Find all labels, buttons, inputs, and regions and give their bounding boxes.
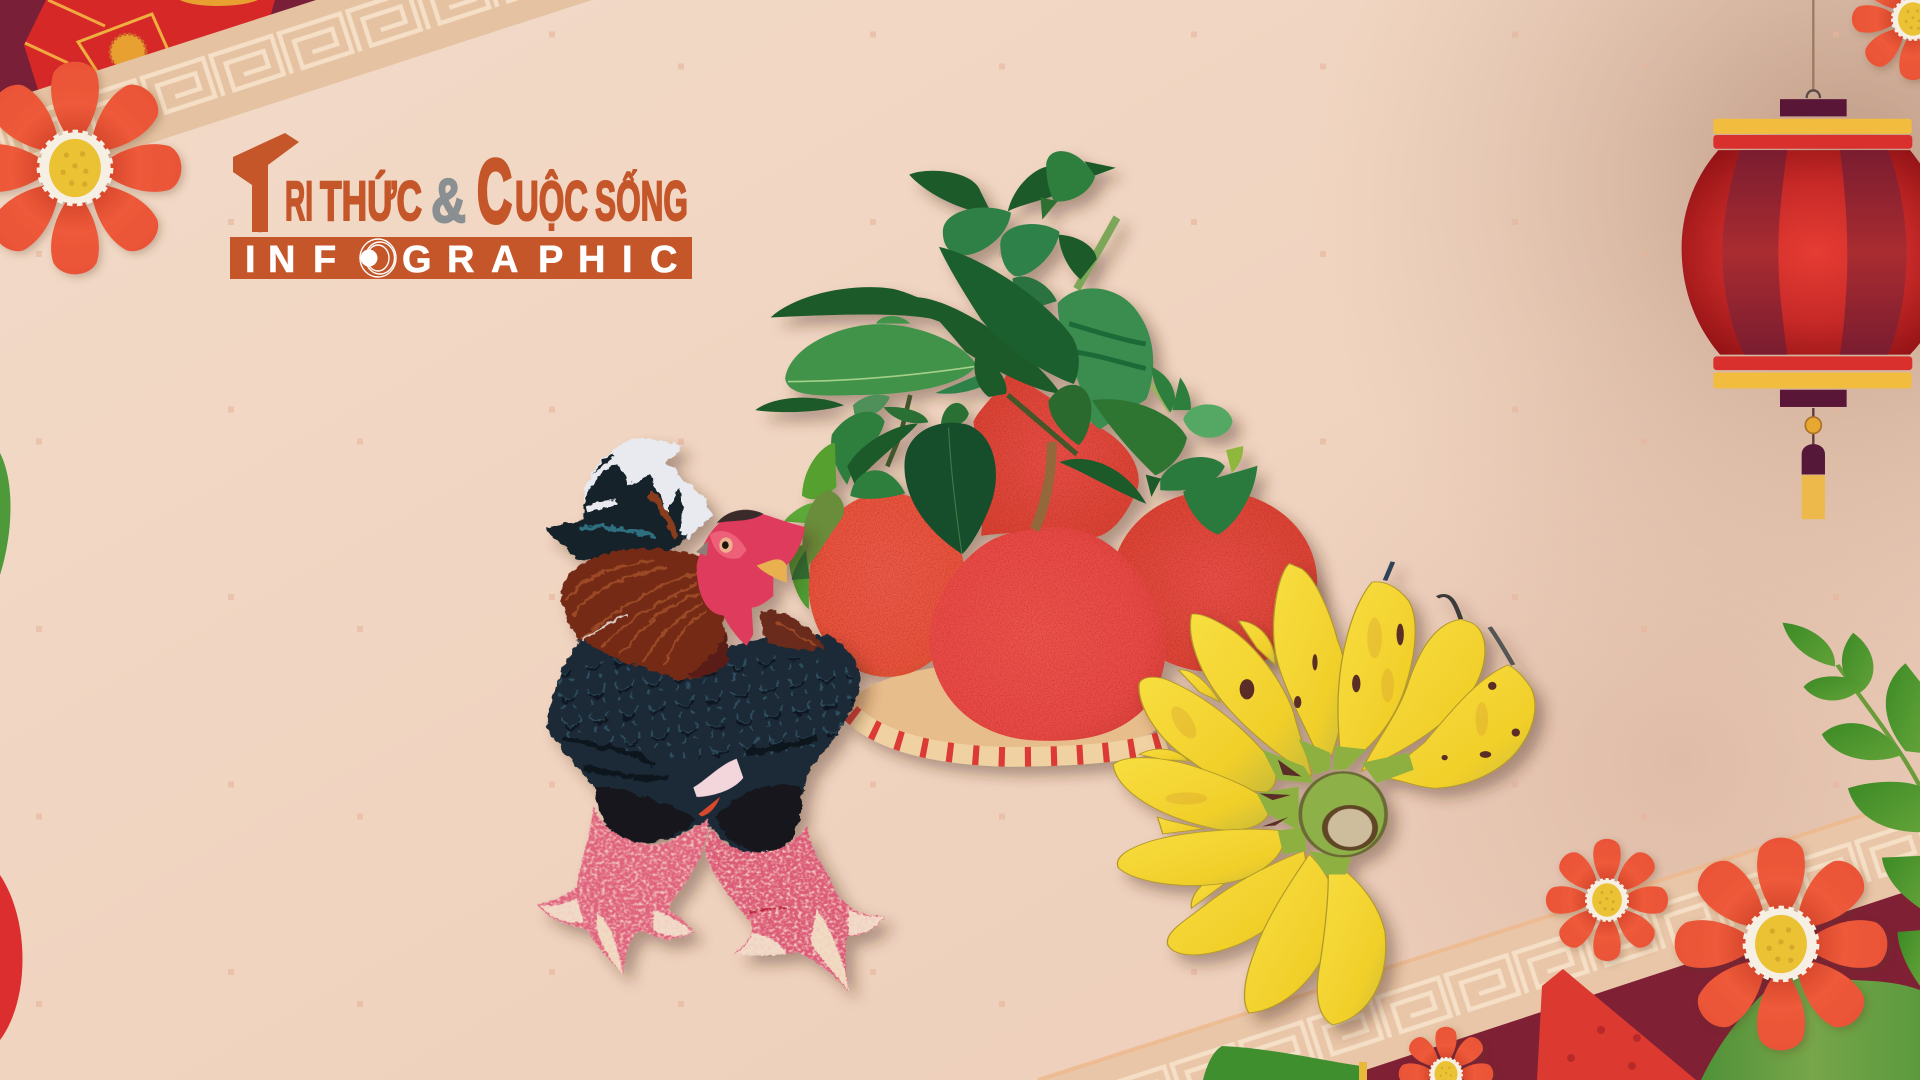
rooster (537, 438, 885, 992)
lantern top yellow bar (1713, 119, 1912, 134)
logo ring icon (360, 239, 396, 277)
lantern body (1682, 150, 1920, 355)
lantern string (1810, 0, 1817, 91)
tail feathers (545, 438, 713, 560)
logo wordmark: RI (285, 169, 313, 232)
lantern top red bar (1713, 135, 1912, 149)
small green leaf (1203, 1046, 1367, 1080)
hackle feathers (560, 548, 825, 680)
lantern top cap (1780, 99, 1847, 116)
patterned ribbon (1038, 797, 1920, 1080)
patterned ribbon (0, 0, 592, 192)
logo wordmark: THỨC (320, 169, 422, 232)
flower: top left (0, 62, 181, 274)
logo wordmark (233, 133, 688, 252)
front pomelo (930, 527, 1166, 741)
banana stems (1385, 562, 1513, 665)
right pomelo (1112, 491, 1317, 672)
logo wordmark: & (431, 167, 466, 236)
flower: top right (1852, 0, 1920, 80)
lantern bottom red bar (1713, 356, 1912, 370)
banana bunch (1113, 562, 1535, 1025)
top-left corner decoration (0, 0, 592, 192)
flower: bottom right small (1546, 839, 1668, 961)
large green leaf (1701, 972, 1920, 1080)
branch and stem (887, 218, 1171, 530)
red envelope (1537, 969, 1696, 1080)
banana crown (1300, 772, 1386, 856)
green vine (1783, 623, 1920, 986)
banana fingers (1113, 564, 1535, 1025)
pomelo fruit tray (755, 151, 1317, 760)
pomelo leaves (755, 151, 1257, 609)
maroon packet (0, 0, 330, 110)
flower: bottom centre (1399, 1027, 1493, 1080)
logo wordmark: T (254, 145, 266, 252)
hanging lantern (1682, 0, 1920, 519)
chest claw (693, 759, 743, 816)
maroon packet (1335, 887, 1920, 1080)
logo wordmark: SỐNG (595, 169, 688, 232)
flower: bottom right large (1675, 838, 1887, 1050)
logo wordmark: UỘC (515, 169, 588, 232)
bottom-right corner decoration (1038, 797, 1920, 1080)
body plumage (547, 634, 860, 856)
banana necks (1257, 739, 1414, 874)
right leg (705, 826, 885, 992)
red envelope (24, 0, 275, 96)
left edge red ball (0, 875, 22, 1040)
lantern bead and tassel (1802, 408, 1825, 519)
woven tray (848, 662, 1168, 760)
head and comb (696, 510, 805, 646)
left edge leaf (0, 453, 10, 575)
pomelo fruits (809, 371, 1317, 741)
logo: Tri thức & Cuộc sống Infographic (230, 133, 692, 281)
lantern bottom cap (1780, 390, 1847, 407)
back pomelo (973, 371, 1139, 537)
left pomelo (809, 493, 966, 677)
left leg (537, 807, 708, 975)
logo wordmark: C (477, 142, 512, 242)
banana brown blushes (1165, 618, 1488, 805)
banana dark spots (1240, 624, 1520, 826)
lantern bottom yellow bar (1713, 373, 1912, 388)
logo infographic band: INFOGRAPHIC (245, 239, 677, 281)
